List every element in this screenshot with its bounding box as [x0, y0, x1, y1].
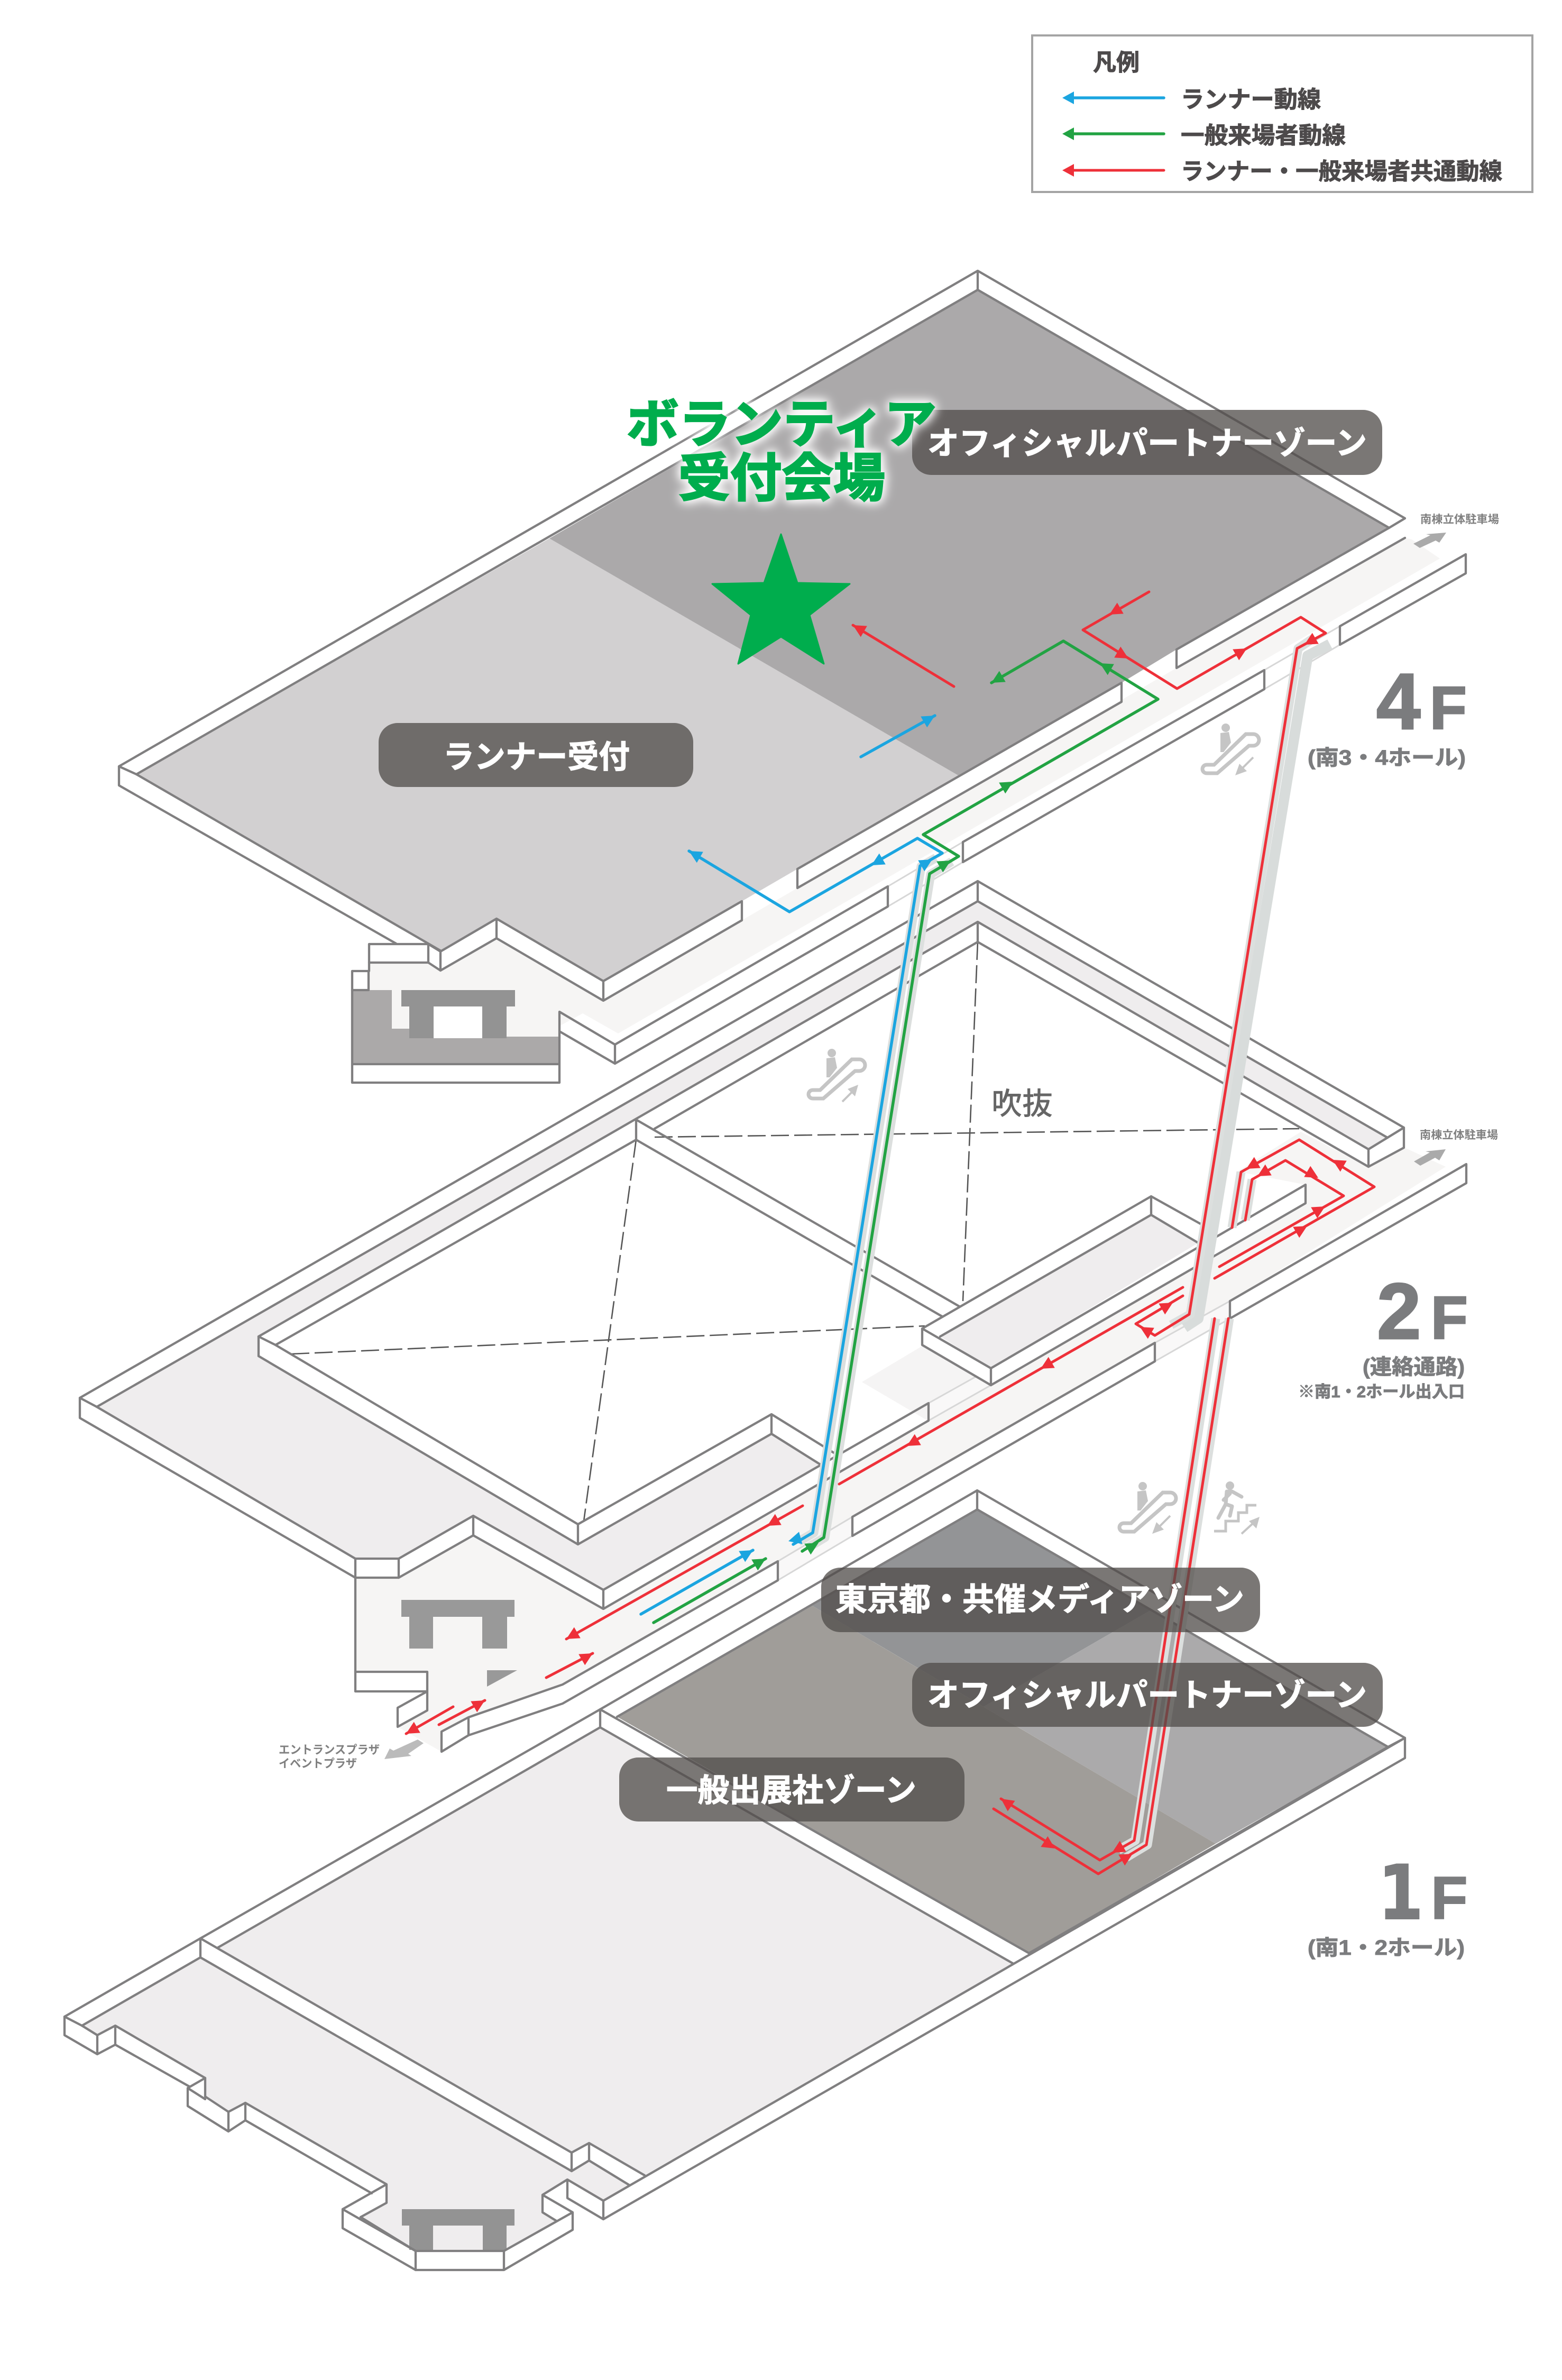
halo of red lines behind box — [1232, 1172, 1252, 1228]
floor label 2F: (連絡通路) — [1363, 1356, 1465, 1379]
label: media zone: 東京都・共催メディアゾーン — [835, 1582, 1244, 1617]
arrowheads 4F — [686, 603, 1319, 872]
icon: escalator down 1F — [1119, 1482, 1176, 1534]
floor label 4F — [1308, 657, 1467, 770]
legend: runner route: ランナー動線 — [1181, 87, 1321, 113]
legend: runner route — [1062, 87, 1321, 113]
floor 1F — [65, 1490, 1405, 2270]
title: volunteer reception — [627, 395, 936, 507]
floor label 1F: (南1・2ホール) — [1308, 1936, 1465, 1960]
label: general exhibitors: 一般出展社ゾーン — [666, 1773, 916, 1808]
label: official partners 1F: オフィシャルパートナーゾーン — [927, 1678, 1367, 1713]
label: official partners 1F — [912, 1663, 1383, 1727]
ghost wall openings 4F — [888, 626, 1340, 907]
icon: escalator down 4F — [1202, 724, 1259, 775]
floor label 4F: (南3・4ホール) — [1308, 746, 1466, 770]
central raised box — [922, 1185, 1306, 1385]
floor: connecting corridor — [355, 1132, 1446, 1752]
floor label 2F: 2 — [1377, 1267, 1421, 1356]
label: media zone — [821, 1568, 1260, 1632]
floor label 4F: 4 — [1376, 657, 1420, 746]
floor label 1F: 1 — [1378, 1850, 1423, 1937]
routes on 2F — [403, 1140, 1374, 1739]
arrowheads 2F — [403, 1155, 1347, 1739]
zone: official partners 4F — [549, 290, 1389, 775]
floor label 4F: F — [1430, 675, 1467, 742]
legend: visitor route: 一般来場者動線 — [1181, 123, 1346, 149]
zone: media — [812, 1509, 1151, 1707]
walls 4F — [119, 271, 1466, 1083]
floor: upper walkway — [97, 901, 1388, 1590]
walls 1F — [65, 1490, 1405, 2270]
zone: general exhibitors floor — [82, 1957, 630, 2251]
red path 4F — [1083, 592, 1326, 1335]
elevator icon 1F — [402, 2209, 514, 2250]
blue line — [689, 838, 942, 1544]
elevator icon 4F — [401, 990, 515, 1038]
red lines down to 1F — [1001, 1319, 1215, 1860]
dark entrance floor — [352, 990, 559, 1064]
entrance plaza label — [279, 1743, 380, 1770]
icon: escalator up 2F — [808, 1049, 865, 1102]
star marker — [712, 534, 850, 664]
floor: lobby hall 1F — [217, 1727, 1013, 2175]
parking label 4F: 南棟立体駐車場 — [1420, 514, 1499, 526]
title: volunteer reception: ボランティア — [627, 395, 936, 453]
label: official partners 4F — [912, 410, 1382, 475]
floor label 2F: F — [1431, 1285, 1468, 1352]
label: official partners 4F: オフィシャルパートナーゾーン — [927, 426, 1367, 461]
ghost wall openings 2F — [778, 1301, 1230, 1580]
elevator icon 2F — [401, 1600, 514, 1649]
entrance plaza arrow — [384, 1740, 424, 1759]
escalator link 4F to 2F runner and visitor — [689, 641, 1158, 1551]
floor label 1F — [1308, 1850, 1468, 1960]
entrance plaza label: イベントプラザ — [279, 1757, 357, 1770]
label: runner reception: ランナー受付 — [443, 739, 630, 775]
label: general exhibitors — [619, 1757, 964, 1821]
legend: shared route: ランナー・一般来場者共通動線 — [1181, 159, 1502, 185]
escalator link 4F to 2F common — [853, 592, 1330, 1335]
red return lines at right — [1215, 1140, 1374, 1278]
escalator link 2F to 1F common — [994, 1319, 1229, 1874]
legend — [1032, 35, 1532, 192]
stair triangle — [487, 1670, 517, 1687]
walls 2F — [80, 881, 1466, 1752]
green short arrow — [654, 1559, 766, 1623]
icon: stairs up 1F — [1214, 1481, 1260, 1534]
zone: exhibitors dark — [617, 1606, 1216, 1953]
floor label 2F: ※南1・2ホール出入口 — [1298, 1383, 1465, 1401]
green line — [802, 641, 1158, 1551]
red line along corridor — [839, 1287, 1183, 1484]
corridor 4F — [369, 538, 1440, 1037]
blue short arrow — [641, 1550, 753, 1614]
zone: official partners 1F — [984, 1610, 1388, 1844]
zone: runner reception floor — [136, 538, 958, 981]
floor 4F — [119, 271, 1466, 1083]
parking arrow 4F — [1413, 533, 1446, 548]
floor label 2F — [1298, 1267, 1468, 1401]
red arrow into hall — [853, 625, 954, 686]
title: volunteer reception: 受付会場 — [678, 449, 885, 507]
parking label 2F: 南棟立体駐車場 — [1420, 1129, 1498, 1141]
floor 2F — [80, 881, 1466, 1752]
blue arrow into hall — [861, 716, 935, 757]
label: runner reception — [379, 723, 693, 787]
shadow under box — [862, 1346, 991, 1421]
legend title: 凡例 — [1093, 50, 1140, 76]
floor label 1F: F — [1431, 1865, 1468, 1932]
arrowheads 1F — [997, 1793, 1136, 1865]
atrium dashed diagonals — [291, 942, 1299, 1521]
legend: visitor route — [1062, 123, 1346, 149]
red short arrows — [406, 1653, 593, 1734]
entrance plaza label: エントランスプラザ — [279, 1743, 380, 1756]
atrium label: 吹抜 — [991, 1087, 1053, 1121]
parking arrow 2F — [1414, 1149, 1446, 1166]
